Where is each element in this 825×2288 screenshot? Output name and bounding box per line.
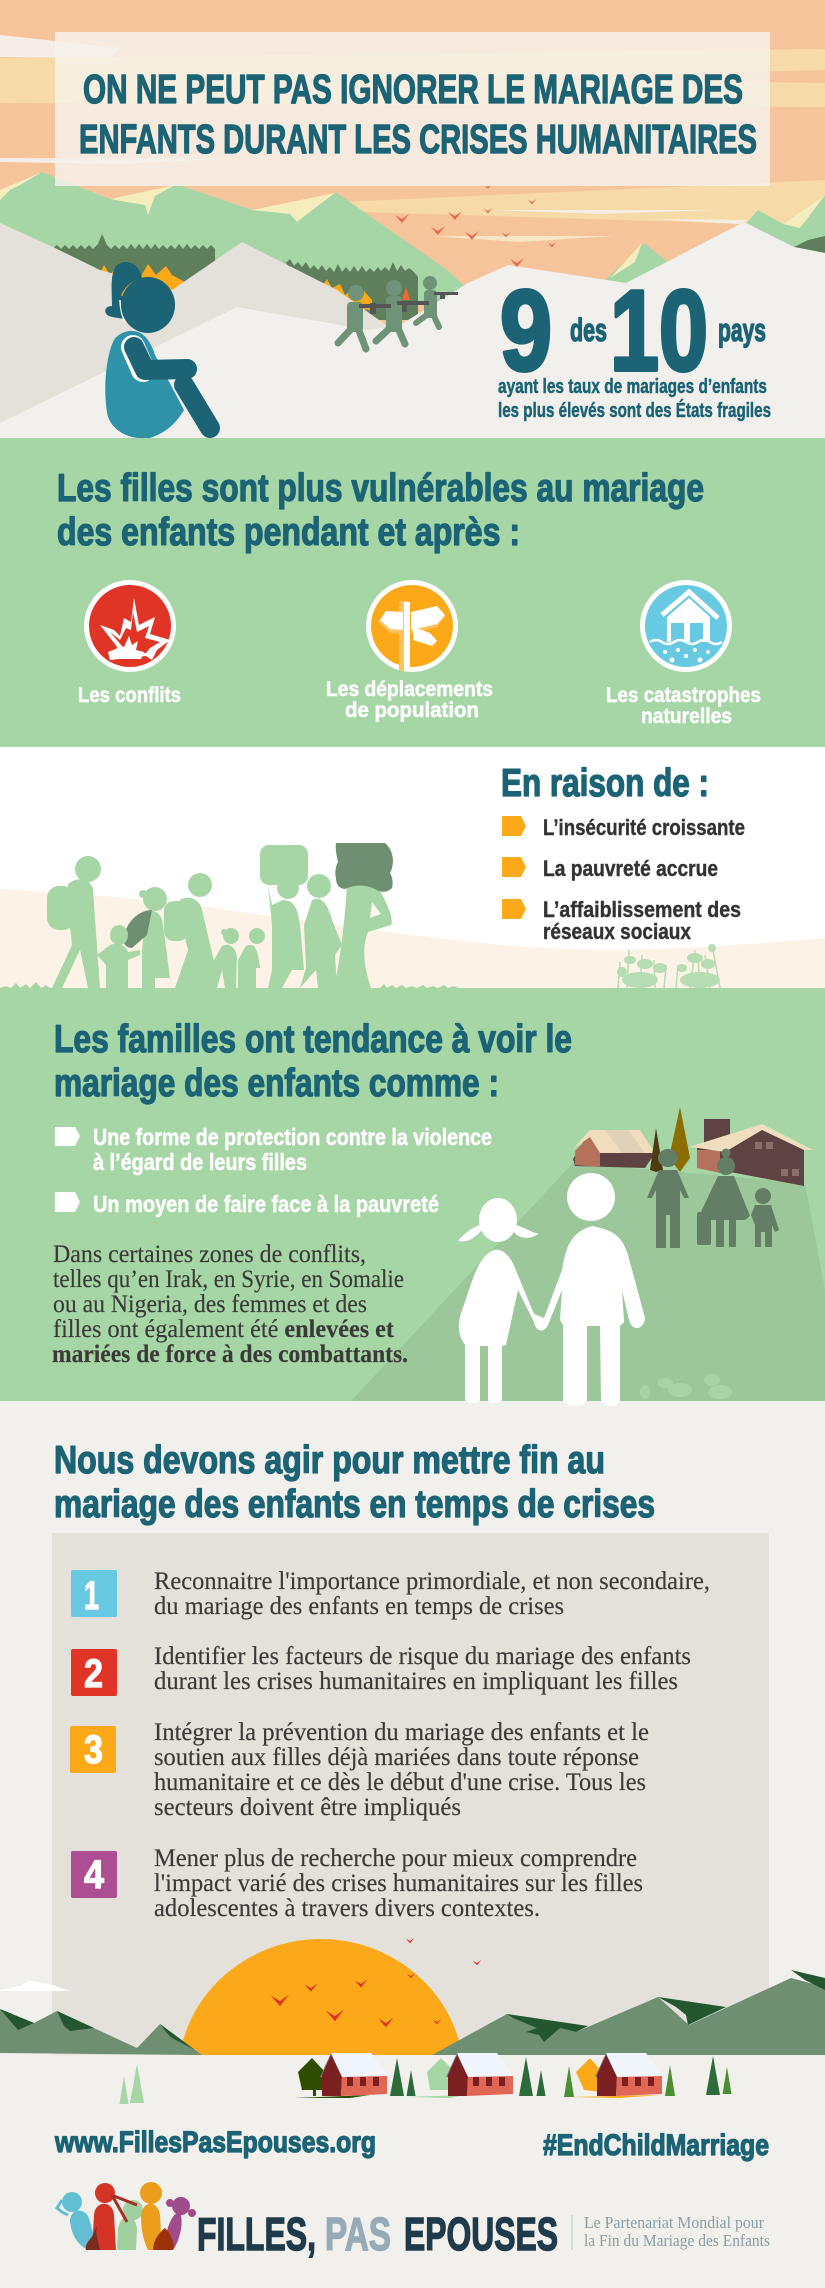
label: natural disasters — [606, 684, 761, 728]
forest — [53, 234, 825, 320]
item 2: durant les crises humanitaires en impliquant les filles — [154, 1668, 678, 1695]
reasons list: réseaux sociaux — [543, 919, 692, 944]
logo wordmark: FILLES, — [197, 2208, 316, 2260]
icon: flooded house — [640, 580, 732, 672]
item 1: du mariage des enfants en temps de crises — [154, 1593, 564, 1620]
item 2: 2 — [84, 1652, 103, 1696]
girl sitting — [105, 262, 210, 438]
grass — [0, 982, 825, 992]
reasons list: La pauvreté accrue — [543, 856, 718, 881]
heading — [54, 1018, 572, 1105]
girl and father silhouette — [458, 1173, 645, 1406]
item 4: Mener plus de recherche pour mieux comprendre — [154, 1845, 637, 1872]
footer links: #EndChildMarriage — [543, 2129, 769, 2162]
reasons list: L’insécurité croissante — [543, 815, 745, 840]
title — [79, 66, 757, 162]
mountains — [0, 1970, 825, 2055]
sun landscape — [0, 1938, 825, 2104]
birds — [271, 1938, 512, 2039]
paragraph: filles ont également été enlevées et — [53, 1316, 395, 1343]
panel: reasons — [0, 747, 825, 992]
bullet list: Un moyen de faire face à la pauvreté — [93, 1191, 439, 1217]
grey and pale hills — [0, 222, 825, 440]
statistic: 9 des 10 pays: 10 — [610, 268, 708, 395]
label: conflicts: Les conflits — [78, 684, 181, 707]
family in distance — [647, 1148, 779, 1248]
soldiers — [338, 276, 458, 349]
bullet list — [55, 1124, 492, 1217]
title box — [55, 32, 770, 186]
sun — [180, 1939, 462, 2055]
item 1: 1 — [84, 1574, 99, 1618]
item 3: soutien aux filles déjà mariées dans toute réponse — [154, 1744, 639, 1771]
light beam — [351, 1163, 825, 1401]
paragraph: ou au Nigeria, des femmes et des — [53, 1291, 367, 1318]
heading: mariage des enfants comme : — [54, 1062, 499, 1105]
trees and houses — [120, 2053, 732, 2104]
item 3: 3 — [84, 1728, 103, 1772]
paragraph — [52, 1241, 408, 1368]
panel: hero — [0, 0, 825, 440]
item 3: Intégrer la prévention du mariage des enfants et le — [154, 1719, 649, 1746]
heading: des enfants pendant et après : — [57, 511, 520, 554]
item 1 — [71, 1568, 710, 1620]
heading: En raison de : — [501, 762, 709, 805]
item 2 — [71, 1643, 691, 1696]
heading — [54, 1439, 655, 1526]
plants — [617, 944, 720, 988]
icon: signpost — [366, 580, 458, 672]
item 4: 4 — [84, 1853, 105, 1897]
paragraph: Dans certaines zones de conflits, — [53, 1241, 366, 1268]
icon: explosion — [84, 580, 176, 672]
item 4: adolescentes à travers divers contextes. — [154, 1895, 540, 1922]
houses — [572, 1107, 813, 1186]
heading: Nous devons agir pour mettre fin au — [54, 1439, 605, 1482]
footer links — [54, 2126, 769, 2162]
plants faint — [640, 1374, 732, 1399]
statistic: 9 des 10 pays: pays — [718, 312, 766, 348]
statistic: 9 des 10 pays: des — [570, 312, 607, 348]
item 3: humanitaire et ce dès le début d'une crise. Tous les — [154, 1769, 646, 1796]
item 4: l'impact varié des crises humanitaires sur les filles — [154, 1870, 643, 1897]
label: displacement: Les déplacements — [326, 678, 493, 701]
reasons list: L’affaiblissement des — [543, 897, 741, 922]
flames — [100, 262, 410, 310]
logo — [57, 2182, 770, 2260]
item 4 — [71, 1845, 643, 1922]
logo wordmark: PAS — [325, 2208, 391, 2260]
label: natural disasters: naturelles — [641, 705, 732, 728]
logo figures — [57, 2182, 196, 2250]
logo wordmark — [197, 2208, 558, 2260]
bullet list: Une forme de protection contre la violence — [93, 1124, 492, 1150]
reasons list — [502, 815, 745, 944]
label: displacement: de population — [345, 699, 479, 722]
logo tagline — [584, 2213, 770, 2250]
action list background — [52, 1533, 769, 2055]
heading: mariage des enfants en temps de crises — [54, 1483, 655, 1526]
logo wordmark: EPOUSES — [404, 2208, 558, 2260]
panel: action — [52, 1439, 769, 2055]
paragraph: mariées de force à des combattants. — [52, 1341, 408, 1368]
label: displacement — [326, 678, 493, 722]
background mountains — [0, 172, 825, 330]
heading — [57, 467, 704, 554]
paragraph: telles qu’en Irak, en Syrie, en Somalie — [53, 1266, 404, 1293]
footer links: www.FillesPasEpouses.org — [54, 2126, 376, 2159]
birds — [395, 184, 556, 267]
displaced people — [47, 843, 393, 988]
item 3: secteurs doivent être impliqués — [154, 1794, 461, 1821]
heading: Les familles ont tendance à voir le — [54, 1018, 572, 1061]
cloud — [0, 1981, 72, 1991]
bullet list: à l’égard de leurs filles — [93, 1149, 307, 1175]
statistic: 9 des 10 pays — [498, 268, 771, 422]
logo tagline: Le Partenariat Mondial pour — [584, 2213, 764, 2232]
panel: vulnerability — [0, 438, 825, 747]
statistic: 9 des 10 pays: 9 — [500, 268, 552, 395]
item 1: Reconnaitre l'importance primordiale, et non secondaire, — [154, 1568, 710, 1595]
item 2: Identifier les facteurs de risque du mariage des enfants — [154, 1643, 691, 1670]
panel: families — [0, 990, 825, 1406]
item 3 — [70, 1719, 649, 1821]
label: natural disasters: Les catastrophes — [606, 684, 761, 707]
logo tagline: la Fin du Mariage des Enfants — [584, 2231, 770, 2250]
